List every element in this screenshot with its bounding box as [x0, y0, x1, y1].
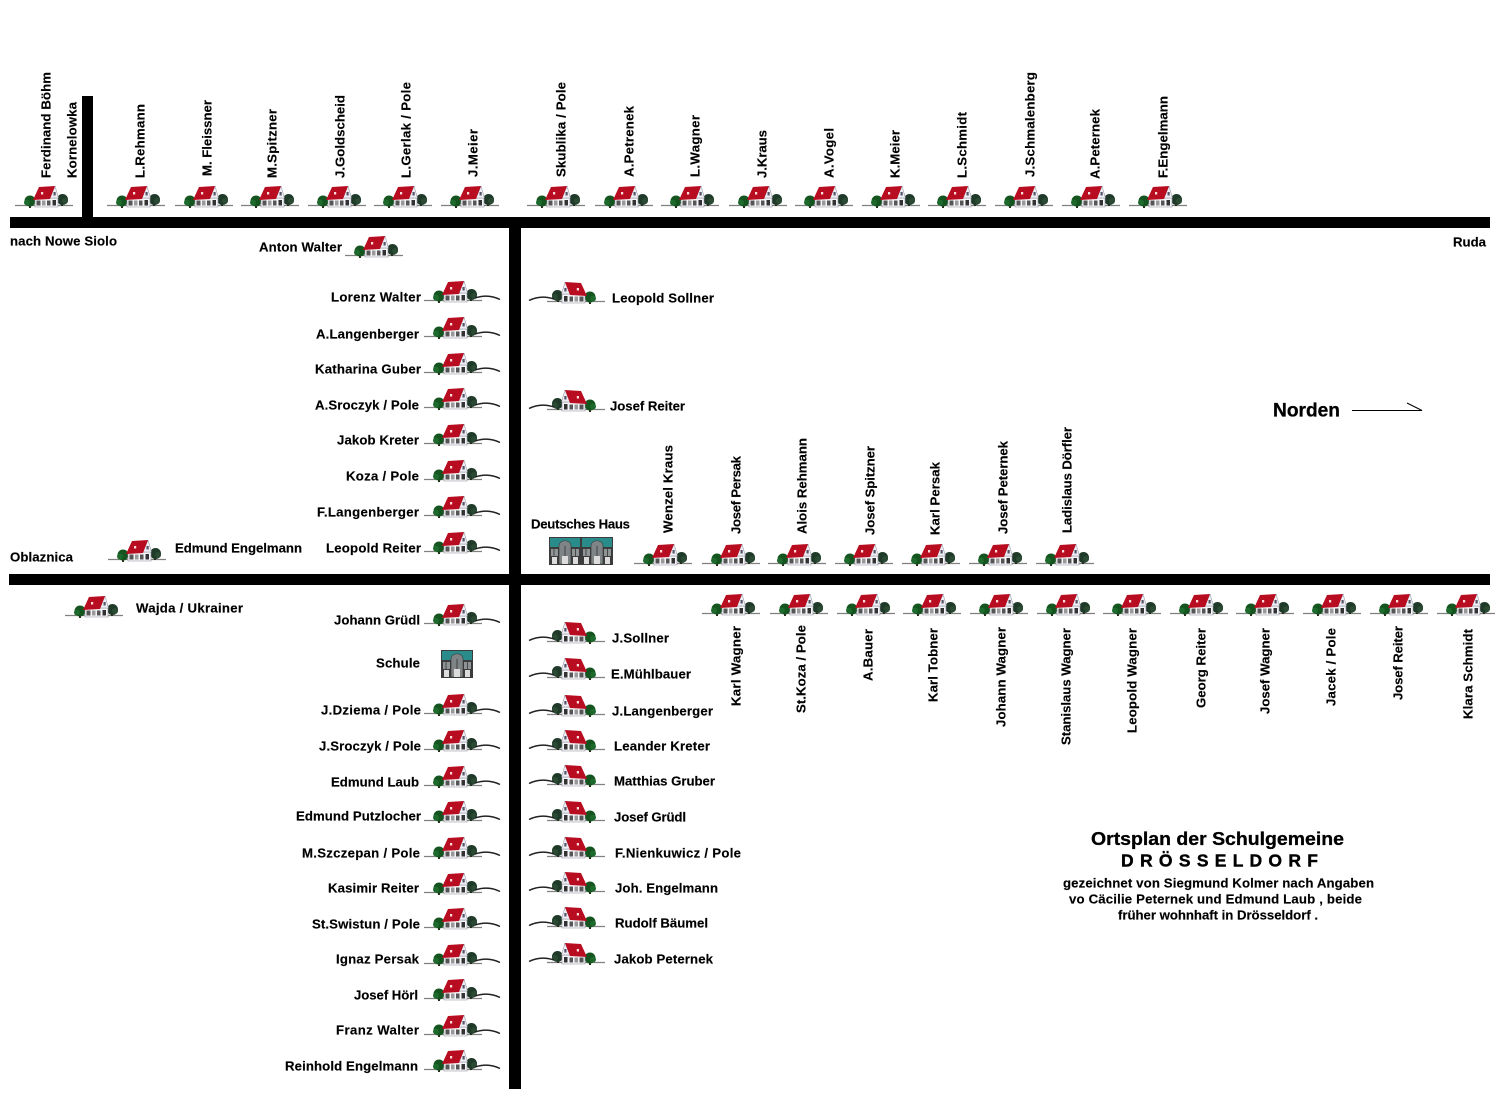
house: Leopold Reiter: Leopold Reiter	[326, 540, 421, 556]
house: J.Meier	[441, 129, 499, 208]
house: Reinhold Engelmann: Reinhold Engelmann	[285, 1058, 418, 1074]
house: Ferdinand Böhm	[15, 72, 73, 208]
house: Edmund Engelmann	[108, 540, 302, 562]
house: Anton Walter: Anton Walter	[259, 240, 342, 254]
house: Josef Persak	[702, 455, 760, 566]
house: M.Spitzner: M.Spitzner	[264, 109, 280, 178]
label: Ruda: Ruda	[1453, 234, 1487, 250]
house: Koza / Pole: Koza / Pole	[346, 468, 419, 484]
house: Lorenz Walter	[331, 281, 500, 304]
house: Ignaz Persak	[336, 944, 500, 966]
house: Josef Reiter: Josef Reiter	[610, 398, 685, 414]
house: St.Koza / Pole: St.Koza / Pole	[794, 625, 808, 713]
house: Johann Grüdl: Johann Grüdl	[334, 612, 420, 628]
house: A.Vogel	[795, 128, 853, 208]
house: A.Sroczyk / Pole	[315, 388, 500, 412]
right column above crossroad	[529, 282, 714, 414]
house: Johann Wagner: Johann Wagner	[994, 627, 1008, 727]
house: J.Schmalenberg: J.Schmalenberg	[1022, 72, 1038, 177]
house: L.Gerlak / Pole: L.Gerlak / Pole	[398, 82, 414, 178]
house: St.Koza / Pole	[770, 594, 828, 713]
label: Kornelowka: Kornelowka	[64, 101, 80, 178]
house: Josef Grüdl: Josef Grüdl	[614, 810, 686, 824]
house: A.Langenberger: A.Langenberger	[316, 326, 419, 342]
house: Rudolf Bäumel	[529, 907, 708, 930]
house: Josef Hörl: Josef Hörl	[354, 988, 418, 1002]
house: Wenzel Kraus	[634, 445, 692, 566]
house: A.Langenberger	[316, 317, 500, 342]
top row of houses	[15, 72, 1187, 208]
house: J.Meier: J.Meier	[466, 129, 480, 177]
house: Alois Rehmann: Alois Rehmann	[794, 438, 810, 534]
house: J.Dziema / Pole	[321, 694, 500, 718]
arrow: north	[1352, 403, 1422, 410]
house: Lorenz Walter: Lorenz Walter	[331, 290, 421, 304]
house: J.Langenberger: J.Langenberger	[612, 704, 713, 718]
house: Matthias Gruber: Matthias Gruber	[614, 774, 715, 788]
house: L.Rehmann: L.Rehmann	[132, 104, 148, 178]
house: A.Bauer	[837, 594, 895, 681]
house: Reinhold Engelmann	[285, 1050, 500, 1074]
house: Edmund Laub: Edmund Laub	[331, 774, 419, 790]
house: A.Petrenek	[595, 105, 653, 208]
house: Jakob Peternek	[529, 943, 714, 966]
house: J.Dziema / Pole: J.Dziema / Pole	[321, 702, 421, 718]
house: Jacek / Pole	[1303, 594, 1361, 706]
house: Josef Spitzner: Josef Spitzner	[862, 446, 878, 535]
label: Norden: Norden	[1273, 400, 1340, 422]
house: Josef Reiter	[1370, 594, 1428, 700]
house: Wajda / Ukrainer	[65, 596, 243, 618]
house: Edmund Putzlocher	[296, 801, 500, 824]
house: Ferdinand Böhm: Ferdinand Böhm	[38, 72, 54, 178]
house: A.Bauer: A.Bauer	[860, 629, 876, 681]
house: J.Goldscheid	[308, 95, 366, 208]
house: Katharina Guber	[315, 353, 500, 376]
house: Josef Peternek: Josef Peternek	[996, 440, 1010, 534]
house: A.Peternek	[1062, 108, 1120, 208]
house: A.Sroczyk / Pole: A.Sroczyk / Pole	[315, 398, 419, 412]
house: Jakob Kreter	[337, 424, 500, 448]
house: Leopold Wagner: Leopold Wagner	[1124, 628, 1140, 733]
house: J.Kraus	[729, 130, 787, 208]
house: Wenzel Kraus: Wenzel Kraus	[660, 445, 676, 533]
lower row of houses	[702, 594, 1495, 745]
house: Rudolf Bäumel: Rudolf Bäumel	[615, 916, 708, 930]
house: Franz Walter	[336, 1015, 500, 1038]
house: A.Peternek: A.Peternek	[1088, 108, 1102, 179]
house: J.Langenberger	[529, 695, 713, 718]
credits: vo Cäcilie Peternek und Edmund Laub , beide	[1069, 892, 1362, 906]
house: M.Spitzner	[241, 109, 299, 208]
house: Anton Walter	[259, 236, 403, 258]
house: L.Wagner: L.Wagner	[688, 115, 702, 177]
house: J.Schmalenberg	[995, 72, 1053, 208]
house: Karl Tobner	[903, 594, 961, 702]
house: St.Swistun / Pole: St.Swistun / Pole	[312, 916, 420, 932]
house: L.Schmidt	[928, 111, 986, 208]
label: Oblaznica: Oblaznica	[10, 550, 74, 564]
right column below crossroad	[529, 622, 741, 966]
house: Franz Walter: Franz Walter	[336, 1022, 419, 1038]
house: Klara Schmidt	[1437, 594, 1495, 719]
house: Karl Wagner: Karl Wagner	[728, 626, 744, 706]
house: Stanislaus Wagner	[1037, 594, 1095, 745]
house: J.Sroczyk / Pole: J.Sroczyk / Pole	[319, 738, 421, 754]
house: J.Sollner: J.Sollner	[612, 630, 669, 646]
house: Josef Spitzner	[835, 446, 893, 566]
house: L.Rehmann	[107, 104, 165, 208]
house: L.Wagner	[661, 115, 719, 208]
house: St.Swistun / Pole	[312, 908, 500, 932]
house: Josef Grüdl	[529, 801, 686, 824]
left column below crossroad	[285, 604, 500, 1074]
house: Ladislaus Dörfler: Ladislaus Dörfler	[1060, 427, 1074, 533]
house: Leopold Sollner: Leopold Sollner	[612, 290, 714, 306]
house: Klara Schmidt: Klara Schmidt	[1460, 628, 1476, 719]
house: Leopold Sollner	[529, 282, 714, 306]
house: Karl Tobner: Karl Tobner	[926, 628, 940, 702]
house: Josef Reiter	[529, 390, 685, 414]
house: Karl Wagner	[702, 594, 760, 706]
house: Georg Reiter	[1170, 594, 1228, 708]
building: Deutsches Haus: Deutsches Haus	[531, 516, 630, 532]
house: F.Nienkuwicz / Pole: F.Nienkuwicz / Pole	[615, 846, 741, 860]
house: Skublika / Pole: Skublika / Pole	[554, 82, 568, 177]
house: Josef Persak: Josef Persak	[728, 455, 744, 534]
house: Jacek / Pole: Jacek / Pole	[1324, 628, 1338, 706]
house: Kasimir Reiter	[328, 873, 500, 896]
house: M. Fleissner	[175, 100, 233, 208]
house: Josef Hörl	[354, 979, 500, 1002]
house: Katharina Guber: Katharina Guber	[315, 362, 421, 376]
house: Alois Rehmann	[768, 438, 826, 566]
house: L.Schmidt: L.Schmidt	[954, 111, 970, 178]
house: Kasimir Reiter: Kasimir Reiter	[328, 880, 419, 896]
house: A.Vogel: A.Vogel	[822, 128, 836, 178]
house: Matthias Gruber	[529, 765, 715, 788]
left column above crossroad	[315, 281, 500, 556]
label: nach Nowe Siolo: nach Nowe Siolo	[10, 234, 117, 248]
house: A.Petrenek: A.Petrenek	[622, 105, 636, 177]
house: Georg Reiter: Georg Reiter	[1194, 628, 1208, 708]
house: Josef Reiter: Josef Reiter	[1390, 626, 1406, 700]
house: Josef Wagner	[1236, 594, 1294, 714]
house: Wajda / Ukrainer: Wajda / Ukrainer	[136, 600, 243, 616]
title: Ortsplan der Schulgemeine: Ortsplan der Schulgemeine	[1091, 828, 1344, 849]
house: Ladislaus Dörfler	[1036, 427, 1094, 566]
house: Joh. Engelmann	[529, 872, 718, 896]
house: J.Kraus: J.Kraus	[754, 130, 770, 178]
house: Koza / Pole	[346, 460, 500, 484]
house: M.Szczepan / Pole: M.Szczepan / Pole	[302, 846, 420, 860]
title: Drösseldorf: D R Ö S S E L D O R F	[1121, 850, 1318, 870]
house: F.Langenberger	[317, 496, 500, 520]
middle row of houses	[634, 427, 1094, 566]
house: Edmund Laub	[331, 766, 500, 790]
title block	[1063, 828, 1374, 922]
house: M.Szczepan / Pole	[302, 837, 500, 860]
house: Jakob Kreter: Jakob Kreter	[337, 432, 419, 448]
credits: früher wohnhaft in Drösseldorf .	[1118, 908, 1318, 922]
house: Josef Wagner: Josef Wagner	[1258, 628, 1272, 714]
house: F.Engelmann	[1129, 96, 1187, 208]
house: Jakob Peternek: Jakob Peternek	[614, 952, 714, 966]
house: K.Meier	[862, 130, 920, 208]
house: E.Mühlbauer	[529, 658, 691, 682]
house: Leander Kreter: Leander Kreter	[614, 738, 710, 754]
credits: gezeichnet von Siegmund Kolmer nach Angaben	[1063, 876, 1374, 890]
house: Leopold Reiter	[326, 532, 500, 556]
house: Edmund Engelmann: Edmund Engelmann	[175, 540, 302, 556]
house: J.Sollner	[529, 622, 669, 646]
house: Karl Persak: Karl Persak	[928, 461, 942, 535]
house: Skublika / Pole	[527, 82, 585, 208]
building: Schule: Schule	[376, 656, 420, 670]
house: J.Goldscheid: J.Goldscheid	[332, 95, 348, 178]
building: Schule	[376, 650, 473, 678]
house: F.Nienkuwicz / Pole	[529, 837, 741, 860]
house: J.Sroczyk / Pole	[319, 730, 500, 754]
house: Karl Persak	[902, 461, 960, 566]
house: F.Langenberger: F.Langenberger	[317, 504, 419, 520]
house: F.Engelmann: F.Engelmann	[1156, 96, 1170, 178]
house: Leander Kreter	[529, 730, 710, 754]
house: Edmund Putzlocher: Edmund Putzlocher	[296, 808, 421, 824]
house: Leopold Wagner	[1103, 594, 1161, 733]
house: K.Meier: K.Meier	[888, 130, 902, 178]
house: M. Fleissner: M. Fleissner	[200, 100, 214, 176]
building: Deutsches Haus	[531, 516, 630, 565]
house: Johann Wagner	[970, 594, 1028, 727]
house: Johann Grüdl	[334, 604, 500, 628]
house: Joh. Engelmann: Joh. Engelmann	[615, 880, 718, 896]
house: L.Gerlak / Pole	[374, 82, 432, 208]
house: Josef Peternek	[969, 440, 1027, 566]
house: Stanislaus Wagner: Stanislaus Wagner	[1058, 628, 1074, 745]
house: E.Mühlbauer: E.Mühlbauer	[611, 666, 691, 682]
house: Ignaz Persak: Ignaz Persak	[336, 952, 420, 966]
credits	[1063, 876, 1374, 922]
